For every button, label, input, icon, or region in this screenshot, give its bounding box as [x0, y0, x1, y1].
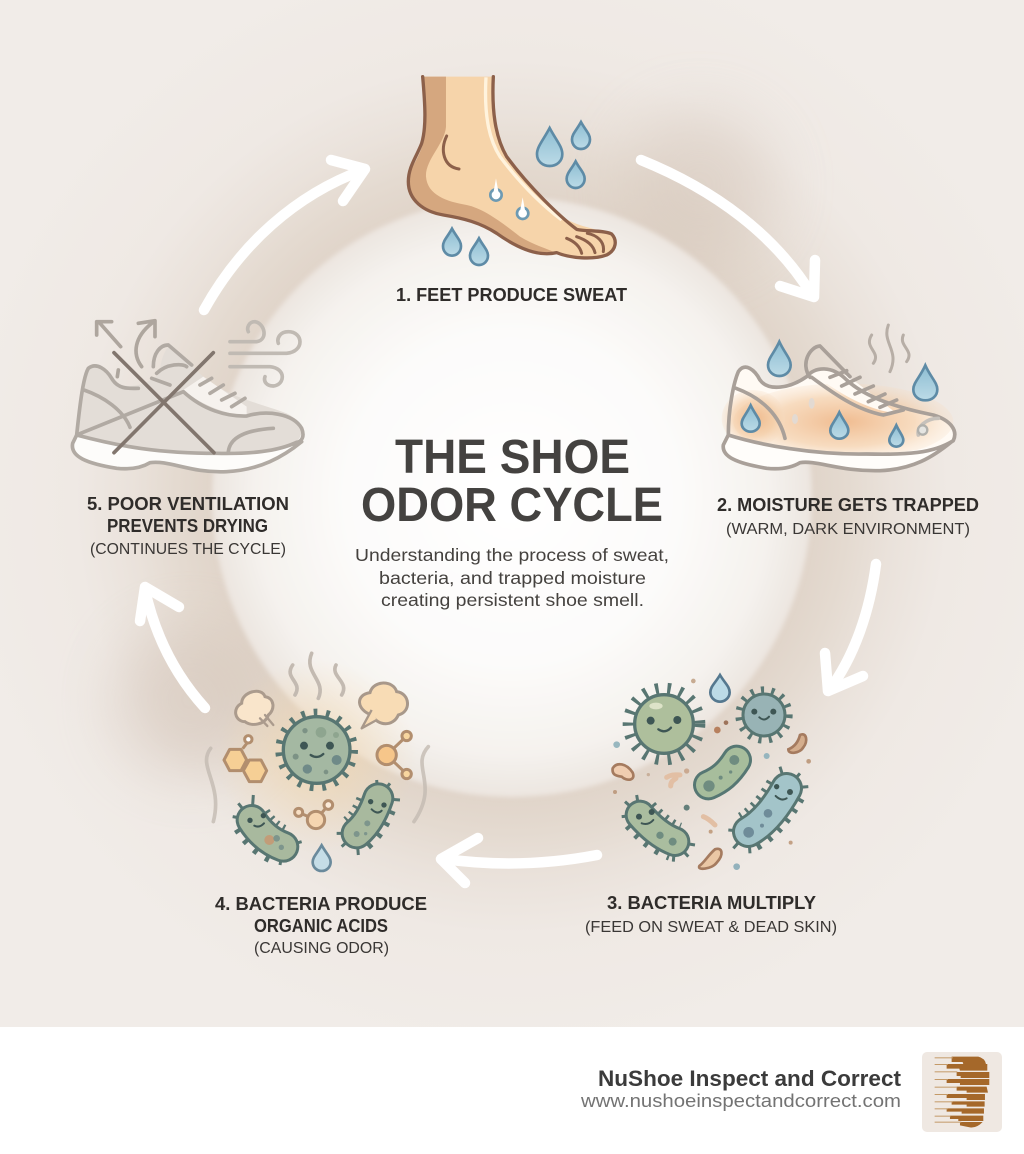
label: step 4: (CAUSING ODOR) [254, 940, 389, 957]
label: step 5: PREVENTS DRYING [107, 516, 268, 536]
arrow: step 5 to step 1 [204, 160, 365, 310]
label: step 1: 1. FEET PRODUCE SWEAT [396, 285, 627, 305]
big bacterium [279, 713, 354, 787]
icon: bacteria producing organic acids [207, 653, 428, 871]
label: step 4: 4. BACTERIA PRODUCE [215, 894, 427, 914]
icon: shoe with trapped moisture [722, 325, 955, 471]
label: step 2: (WARM, DARK ENVIRONMENT) [726, 521, 970, 538]
logo [922, 1052, 1002, 1132]
blue rod bacterium [728, 767, 808, 853]
description text: creating persistent shoe smell. [381, 590, 644, 610]
title: ODOR CYCLE [361, 479, 663, 532]
website url: www.nushoeinspectandcorrect.com [580, 1090, 901, 1111]
label: step 2: 2. MOISTURE GETS TRAPPED [717, 495, 979, 515]
description text [355, 545, 669, 610]
arrow: step 1 to step 2 [641, 160, 815, 297]
description text: Understanding the process of sweat, [355, 545, 669, 565]
molecule right [377, 731, 411, 779]
arrow: step 3 to step 4 [441, 838, 597, 883]
footer bar [0, 1027, 1024, 1154]
bean bacterium [703, 755, 739, 792]
label: step 3 [585, 893, 837, 936]
molecule bottom [295, 801, 333, 829]
right bacterium [337, 780, 400, 855]
drop [313, 845, 331, 871]
icon: foot with sweat drops [408, 77, 615, 265]
label: step 4: ORGANIC ACIDS [254, 916, 388, 936]
title [361, 431, 663, 532]
label: step 2 [717, 495, 979, 538]
label: step 5: 5. POOR VENTILATION [87, 494, 289, 514]
arrow: step 4 to step 5 [140, 587, 205, 708]
cloud right [360, 683, 408, 724]
label: step 5: (CONTINUES THE CYCLE) [90, 541, 286, 558]
small blue bacterium [740, 691, 788, 739]
hexagons [224, 736, 267, 782]
arrow: step 2 to step 3 [825, 564, 876, 691]
label: step 3: 3. BACTERIA MULTIPLY [607, 893, 816, 913]
label: step 3: (FEED ON SWEAT & DEAD SKIN) [585, 919, 837, 936]
green rod bacterium [622, 795, 695, 862]
brand name: NuShoe Inspect and Correct [598, 1066, 902, 1091]
icon: shoe with poor ventilation [72, 321, 303, 472]
label: step 4 [215, 894, 427, 957]
cloud left [236, 691, 273, 724]
label: step 5 [87, 494, 289, 558]
left bacterium [233, 795, 302, 865]
title: THE SHOE [395, 431, 630, 484]
icon: bacteria multiplying [613, 675, 811, 870]
big green bacterium [629, 689, 699, 759]
description text: bacteria, and trapped moisture [379, 568, 646, 588]
